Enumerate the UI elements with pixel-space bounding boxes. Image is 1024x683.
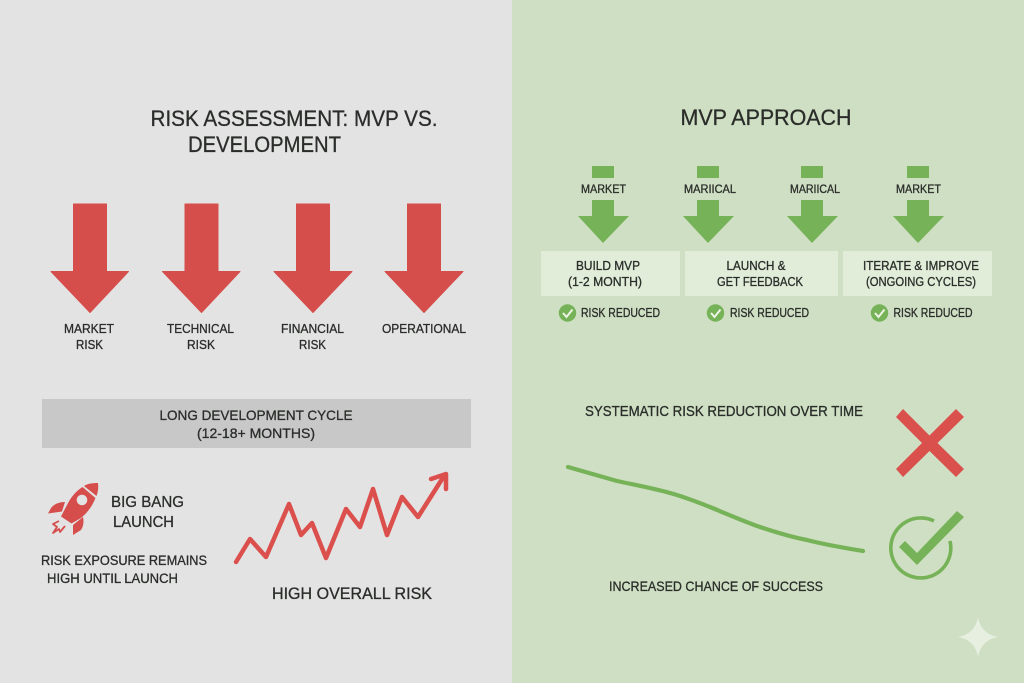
arrow labels: MARKET [896,182,942,196]
banner: long development cycle [42,399,471,448]
title: MVP approach: MVP APPROACH [680,105,852,130]
risk reduced badge 2: RISK REDUCED [730,306,809,320]
title: risk assessment: RISK ASSESSMENT: MVP VS. [150,106,438,131]
chart: rising risk line [236,474,446,562]
icon: operational risk arrow [385,204,463,312]
icon: green arrow 2 [683,166,734,243]
step: iterate and improve: (ONGOING CYCLES) [866,275,976,289]
step: launch and get feedback: LAUNCH & [726,259,786,273]
step: build MVP: BUILD MVP [576,259,640,273]
chart: declining risk line [568,467,863,551]
title: risk assessment: DEVELOPMENT [188,132,341,157]
icon: red cross [896,409,964,477]
icon: green arrow 3 [787,166,838,243]
risk arrows: red [51,204,463,312]
icon: green check in circle [891,511,964,578]
icon: rocket [48,483,98,535]
text: risk exposure note [41,553,207,586]
text: risk exposure note: HIGH UNTIL LAUNCH [47,571,178,586]
risk reduced badge 1 [559,304,660,322]
step: iterate and improve [843,251,992,296]
label: high overall risk: HIGH OVERALL RISK [272,584,433,603]
risk labels: RISK [76,338,104,352]
risk reduced badge 2 [707,304,809,322]
risk labels: OPERATIONAL [382,322,466,336]
step: launch and get feedback [685,251,838,296]
step: build MVP: (1-2 MONTH) [568,275,642,289]
arrow labels [581,182,942,196]
arrow labels: MARIICAL [684,182,736,196]
icon: financial risk arrow [274,204,352,312]
icon: sparkle watermark [958,617,998,657]
risk labels: MARKET [64,322,114,336]
banner: long development cycle: LONG DEVELOPMENT CYCLE [160,407,352,423]
risk labels: RISK [187,338,216,352]
text: big bang launch: BIG BANG [111,494,184,511]
step: iterate and improve: ITERATE & IMPROVE [863,259,979,273]
risk reduced badge 1: RISK REDUCED [581,306,660,320]
text: big bang launch [111,494,184,531]
risk labels: TECHNICAL [167,322,234,336]
step: launch and get feedback: GET FEEDBACK [717,275,804,289]
arrow labels: MARKET [581,182,627,196]
risk reduced badge 3 [871,304,972,322]
icon: market risk arrow [51,204,128,312]
risk labels: RISK [299,338,327,352]
icon: green arrow 4 [893,166,944,243]
banner: long development cycle: (12-18+ MONTHS) [197,425,315,441]
risk labels: FINANCIAL [281,322,344,336]
arrow labels: MARIICAL [790,182,840,196]
text: big bang launch: LAUNCH [113,514,174,531]
icon: technical risk arrow [162,204,240,312]
panel: traditional development background [0,0,512,683]
risk labels [64,322,466,352]
label: increased chance of success: INCREASED CHANCE OF SUCCESS [609,578,823,594]
text: risk exposure note: RISK EXPOSURE REMAINS [41,553,207,568]
green arrows [578,166,944,243]
icon: green arrow 1 [578,166,629,243]
step: build MVP [541,251,680,296]
title: risk assessment [150,106,438,157]
panel: MVP approach background [512,0,1024,683]
risk reduced badge 3: RISK REDUCED [894,306,972,320]
heading: systematic risk reduction: SYSTEMATIC RISK REDUCTION OVER TIME [585,404,863,420]
